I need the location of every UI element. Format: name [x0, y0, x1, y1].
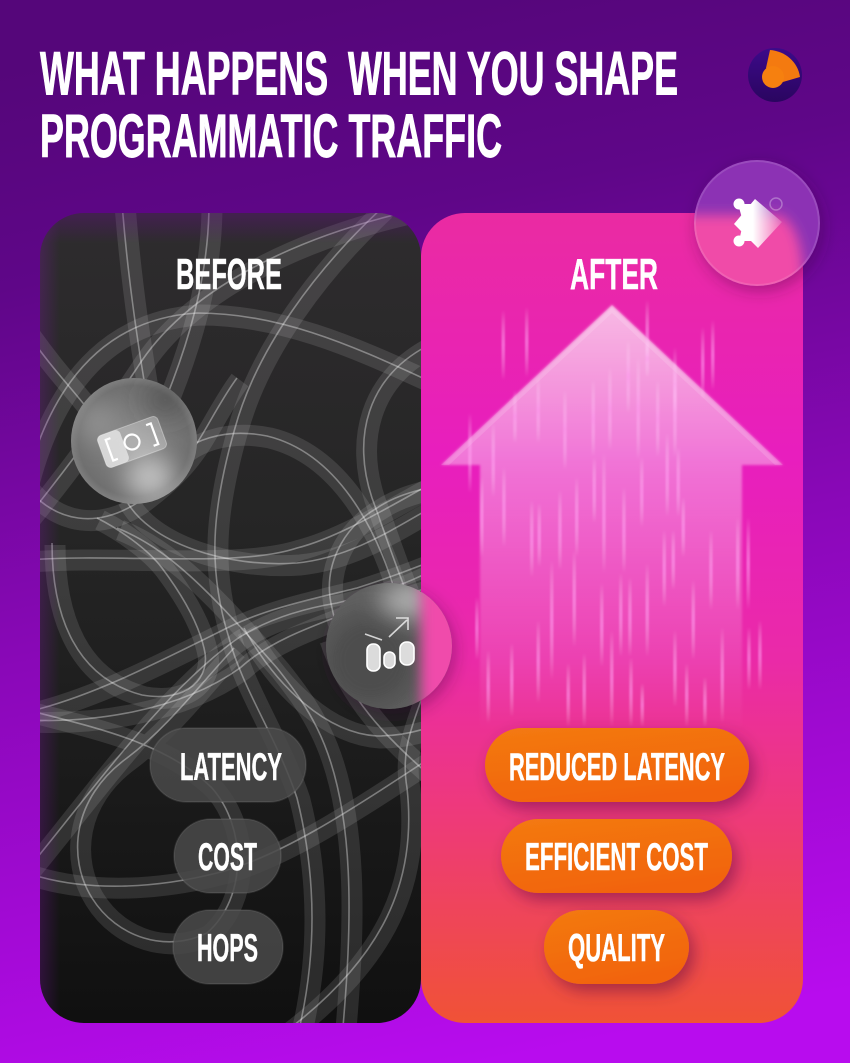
chart symbol: [365, 618, 414, 671]
pill: quality: QUALITY: [568, 927, 665, 970]
pill: efficient cost: [501, 819, 732, 893]
pill: cost: COST: [198, 836, 257, 879]
pill: hops: HOPS: [197, 927, 258, 970]
icon: chart glass circle: [326, 580, 464, 717]
icon: camera glass circle: [71, 378, 197, 504]
title: [40, 40, 678, 170]
streaks: [468, 300, 762, 727]
panel: before: [27, 203, 430, 1040]
arrow: upward traffic: [441, 305, 783, 730]
heading: after: AFTER: [570, 250, 658, 299]
pill: cost: [174, 819, 281, 893]
pill: reduced latency: [485, 728, 749, 802]
pill: latency: LATENCY: [180, 746, 282, 789]
puzzle symbol: [734, 198, 782, 248]
icon: logo: [748, 48, 802, 102]
pill: latency: [150, 728, 306, 802]
camera symbol: [96, 415, 168, 469]
pill: quality: [544, 910, 689, 984]
panel: after: [421, 213, 803, 1023]
pill: hops: [173, 910, 283, 984]
tangled traffic lines: [27, 203, 430, 1040]
heading: before: BEFORE: [176, 250, 282, 299]
pill: efficient cost: EFFICIENT COST: [525, 836, 708, 879]
title: PROGRAMMATIC TRAFFIC: [40, 102, 502, 170]
icon: puzzle glass circle: [670, 160, 820, 300]
